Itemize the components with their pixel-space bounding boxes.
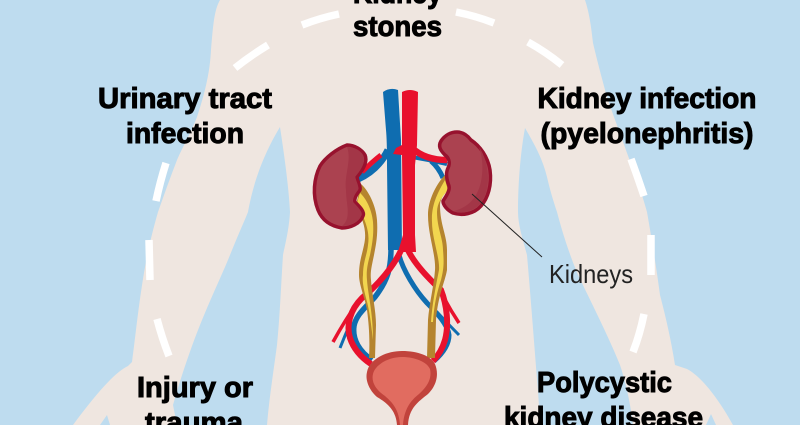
callout: kidneys: Kidneys: [549, 259, 633, 289]
aorta: [393, 90, 418, 252]
heading: urinary tract infection: [98, 83, 272, 150]
heading: kidney stones: stones: [353, 11, 442, 43]
heading: kidney infection: (pyelonephritis): [540, 118, 754, 150]
renal arteries: [362, 148, 447, 172]
heading: injury or trauma: Injury or: [137, 372, 253, 404]
renal veins: [358, 150, 447, 179]
heading: urinary tract infection: infection: [126, 118, 244, 150]
lower arteries: [333, 248, 459, 364]
ureter left: [356, 184, 377, 358]
bladder: [366, 351, 437, 425]
ureter right: [427, 173, 449, 358]
kidney left: [314, 145, 366, 228]
heading: kidney infection: [538, 83, 756, 150]
callout: kidneys: [472, 194, 633, 289]
panel: urinary system anatomy: [314, 89, 491, 425]
heading: urinary tract infection: Urinary tract: [98, 83, 272, 115]
kidney right: [440, 132, 491, 214]
heading: kidney infection: Kidney infection: [538, 83, 756, 115]
heading: polycystic kidney disease: [504, 367, 703, 425]
heading: polycystic kidney disease: Polycystic: [537, 367, 672, 399]
dashed white ring: [149, 12, 651, 356]
vena cava: [383, 89, 402, 250]
heading: injury or trauma: [137, 372, 253, 425]
lower veins: [340, 248, 459, 361]
